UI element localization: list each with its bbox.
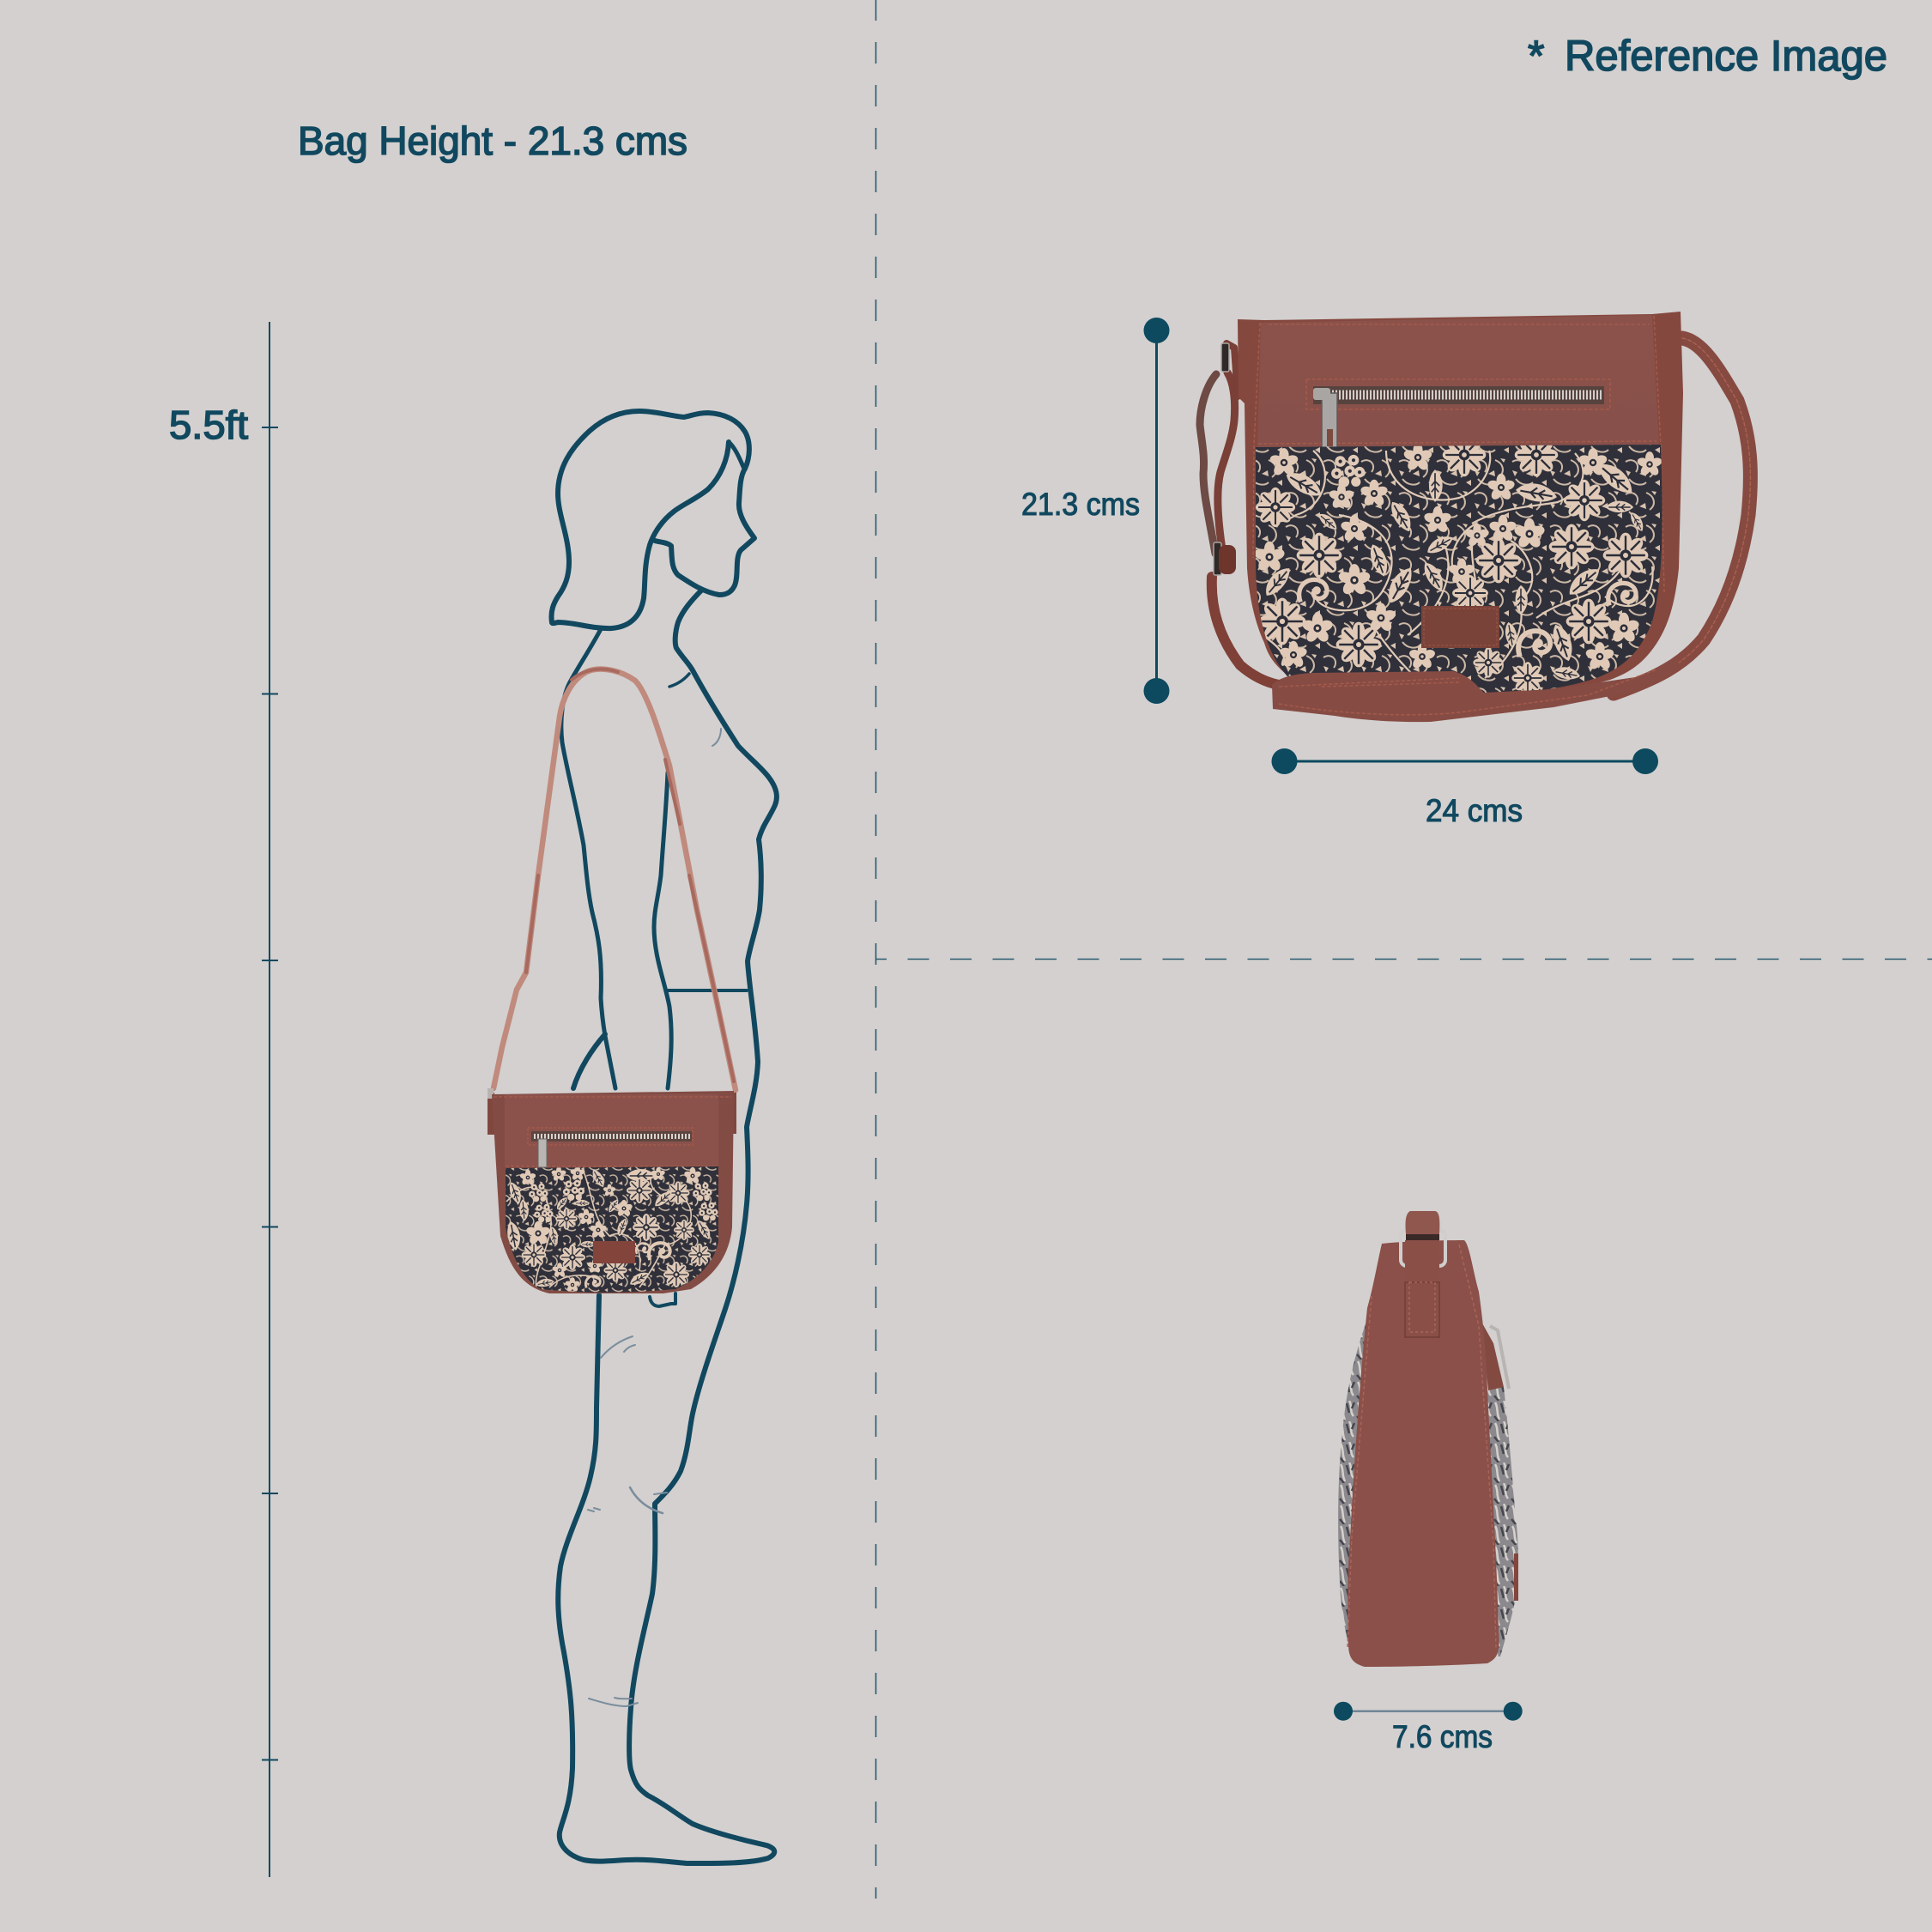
large front bag view [1200, 312, 1750, 722]
small bag: logo patch [593, 1241, 635, 1263]
large bag: logo patch [1421, 606, 1499, 648]
large bag: front strap loop [1272, 657, 1681, 722]
side bag: ring and strap [1401, 1211, 1445, 1337]
large bag: shoulder strap [1200, 338, 1750, 693]
side bag: leather panel [1348, 1240, 1499, 1667]
small bag: top panel [494, 1094, 731, 1167]
large bag: buckles [1214, 343, 1236, 575]
figure: shoulder strap [494, 669, 736, 1090]
large bag: floral fabric [1251, 433, 1668, 695]
label: 24 cms: 24 cms [1426, 793, 1523, 828]
height label: 5.5ft [169, 403, 248, 447]
dimension: bag width [1272, 748, 1658, 774]
figure: woman silhouette [551, 411, 777, 1863]
side bag: zip edge [1481, 1322, 1518, 1601]
small bag: floral fabric [502, 1163, 725, 1296]
side bag view [1338, 1211, 1518, 1667]
dimension: bag depth [1334, 1702, 1523, 1721]
dimension: bag height [1143, 318, 1169, 704]
small bag: body [492, 1091, 734, 1293]
label: 21.3 cms: 21.3 cms [1021, 487, 1140, 522]
title: bag height: Bag Height - 21.3 cms [298, 118, 687, 163]
small bag carried by figure [488, 1088, 736, 1296]
large bag: top panel [1253, 315, 1664, 592]
label: 7.6 cms: 7.6 cms [1392, 1719, 1493, 1754]
small bag: side tabs and clasp [488, 1088, 736, 1135]
height ruler [262, 322, 278, 1877]
large bag: body [1238, 312, 1683, 695]
note: reference image: Reference Image [1565, 32, 1887, 80]
note: reference image: * [1528, 32, 1544, 80]
side bag: fabric gusset [1338, 1322, 1518, 1656]
